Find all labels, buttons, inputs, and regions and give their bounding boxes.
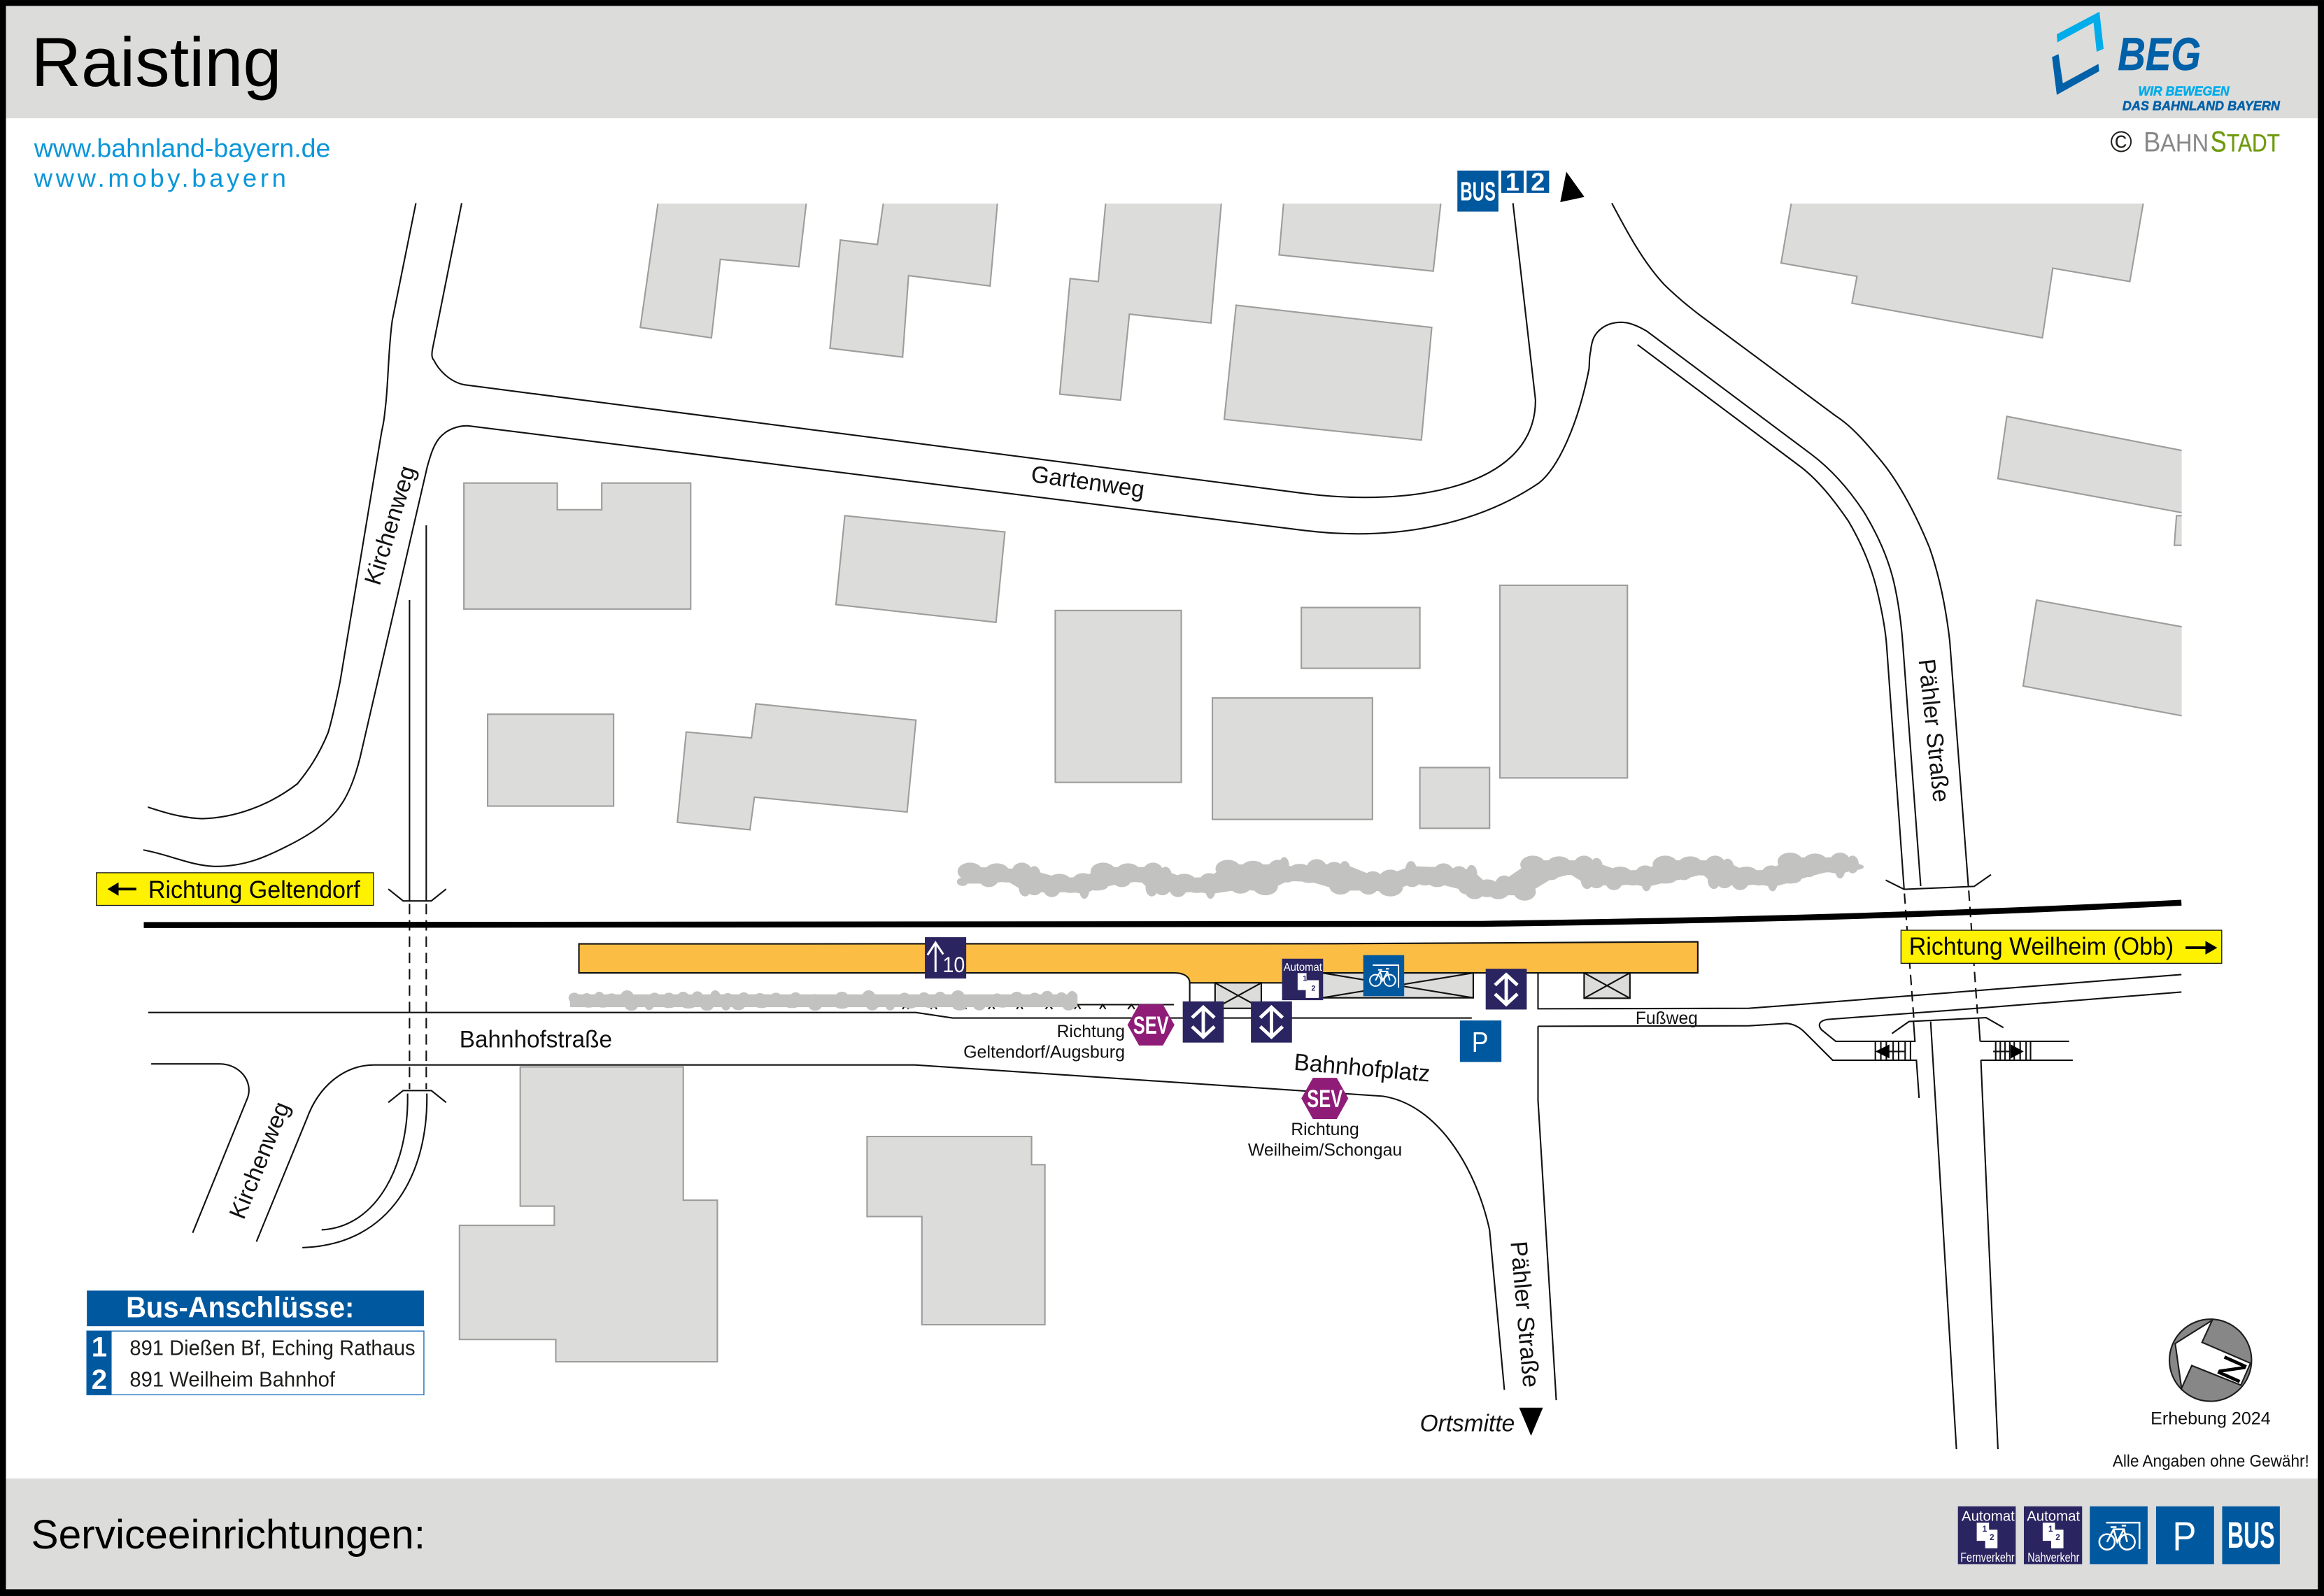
website links — [34, 134, 330, 192]
panel: bus connections: 1 — [92, 1332, 107, 1363]
icon: SEV east — [1301, 1078, 1348, 1119]
legend icon: parking — [2156, 1506, 2214, 1564]
icon: stairs 2 — [1251, 1002, 1292, 1043]
icon: stairs 1 — [1183, 1002, 1224, 1043]
legend icon: Automat Fernverkehr — [1958, 1506, 2015, 1565]
header band — [6, 6, 2318, 118]
icon: sector 10 — [925, 937, 966, 978]
icon: SEV west: SEV — [1133, 1012, 1169, 1039]
footer band — [6, 1479, 2318, 1589]
copyright BahnStadt: AHN — [2160, 131, 2209, 157]
footer heading: Serviceeinrichtungen: — [31, 1512, 425, 1558]
street label: Bahnhofplatz: Bahnhofplatz — [1293, 1049, 1431, 1088]
panel: bus connections: Bus-Anschlüsse: — [126, 1291, 354, 1323]
panel: bus connections: 891 Weilheim Bahnhof — [129, 1367, 335, 1392]
legend icon: Automat Nahverkehr — [2024, 1506, 2082, 1565]
street label: Kirchenweg south: Kirchenweg — [225, 1098, 295, 1223]
hedge north — [957, 853, 1864, 901]
SEV label west: Geltendorf/Augsburg — [963, 1043, 1125, 1062]
copyright BahnStadt: S — [2211, 125, 2227, 158]
copyright BahnStadt: B — [2144, 127, 2160, 158]
SEV label east — [1248, 1120, 1402, 1160]
BEG logo: WIR BEWEGEN — [2139, 84, 2230, 99]
icon: automat: Automat — [1284, 962, 1323, 974]
street label: Gartenweg: Gartenweg — [1030, 461, 1146, 503]
street label: Kirchenweg north: Kirchenweg — [360, 463, 421, 588]
icon: bus stop: 2 — [1531, 167, 1545, 196]
legend icon: Automat Nahverkehr: 2 — [2055, 1532, 2060, 1542]
arrow: to bus stop — [1560, 172, 1585, 202]
SEV label east: Richtung — [1291, 1120, 1359, 1139]
legend icon: Automat Fernverkehr: Fernverkehr — [1960, 1551, 2015, 1565]
BEG logo: BEG — [2118, 29, 2201, 80]
icon: bike parking map — [1363, 955, 1404, 996]
legend icon: bus: BUS — [2227, 1515, 2275, 1556]
legend icon: Automat Nahverkehr: Nahverkehr — [2027, 1551, 2079, 1565]
BEG logo: DAS BAHNLAND BAYERN — [2123, 99, 2280, 113]
icon: automat: 2 — [1312, 984, 1316, 992]
icon: automat: 1 — [1303, 975, 1307, 983]
fence — [902, 1004, 1174, 1009]
legend icon: Automat Fernverkehr: Automat — [1962, 1509, 2015, 1525]
label: Richtung Geltendorf — [97, 873, 374, 905]
stairs east — [1993, 1041, 2031, 1060]
icon: parking map: P — [1472, 1026, 1489, 1058]
label: Richtung Weilheim: Richtung Weilheim (Obb) — [1909, 933, 2174, 960]
icon: SEV east: SEV — [1307, 1085, 1343, 1113]
legend icon: bike parking — [2090, 1506, 2148, 1564]
icon: bus stop: 1 — [1505, 167, 1519, 196]
roads — [143, 203, 2181, 1449]
legend icon: Automat Fernverkehr: 1 — [1983, 1524, 1988, 1534]
buildings — [460, 178, 2209, 1362]
survey note: Erhebung 2024 — [2151, 1410, 2271, 1429]
icon: bus stop: BUS — [1460, 176, 1496, 206]
website links: www.moby.bayern — [34, 164, 286, 192]
railway track — [144, 903, 2181, 925]
icon: SEV west — [1128, 1004, 1175, 1046]
legend icon: Automat Fernverkehr: 2 — [1990, 1532, 1994, 1542]
panel: bus connections: 2 — [92, 1364, 107, 1395]
label: Richtung Geltendorf: Richtung Geltendorf — [148, 876, 360, 904]
copyright BahnStadt — [2110, 125, 2280, 158]
legend icon: parking: P — [2172, 1514, 2196, 1560]
icon: automat — [1282, 959, 1323, 1000]
platform — [579, 942, 1698, 983]
platform shelters and walls — [1190, 973, 1630, 1009]
street label: Bahnhofstraße: Bahnhofstraße — [460, 1026, 612, 1053]
title: Raisting — [31, 24, 282, 101]
website links: www.bahnland-bayern.de — [34, 134, 330, 163]
Ortsmitte direction: Ortsmitte — [1420, 1411, 1515, 1437]
street label: Pähler Straße south: Pähler Straße — [1505, 1240, 1544, 1388]
icon: bus stop — [1457, 167, 1549, 212]
stairs west — [1876, 1041, 1911, 1060]
SEV label west — [963, 1022, 1125, 1062]
legend icon: Automat Nahverkehr: 1 — [2048, 1524, 2053, 1534]
panel: bus connections: 891 Dießen Bf, Eching Rathaus — [129, 1335, 416, 1360]
legend icon: bus — [2222, 1506, 2280, 1564]
icon: parking map — [1460, 1020, 1501, 1062]
hedge south — [569, 990, 1077, 1011]
copyright BahnStadt: © — [2110, 125, 2132, 158]
disclaimer: Alle Angaben ohne Gewähr! — [2113, 1453, 2309, 1471]
street label: Fußweg: Fußweg — [1636, 1009, 1698, 1028]
icon: sector 10: 10 — [942, 952, 965, 977]
street label: Pähler Straße north: Pähler Straße — [1913, 657, 1955, 804]
panel: bus connections — [87, 1290, 424, 1395]
SEV label west: Richtung — [1057, 1022, 1125, 1041]
icon: stairs 3 — [1486, 969, 1526, 1009]
compass — [2169, 1319, 2255, 1402]
BEG logo — [2052, 12, 2280, 113]
SEV label east: Weilheim/Schongau — [1248, 1141, 1402, 1160]
compass: N — [2210, 1351, 2255, 1388]
copyright BahnStadt: TADT — [2227, 131, 2280, 157]
legend icon: Automat Nahverkehr: Automat — [2027, 1509, 2080, 1525]
